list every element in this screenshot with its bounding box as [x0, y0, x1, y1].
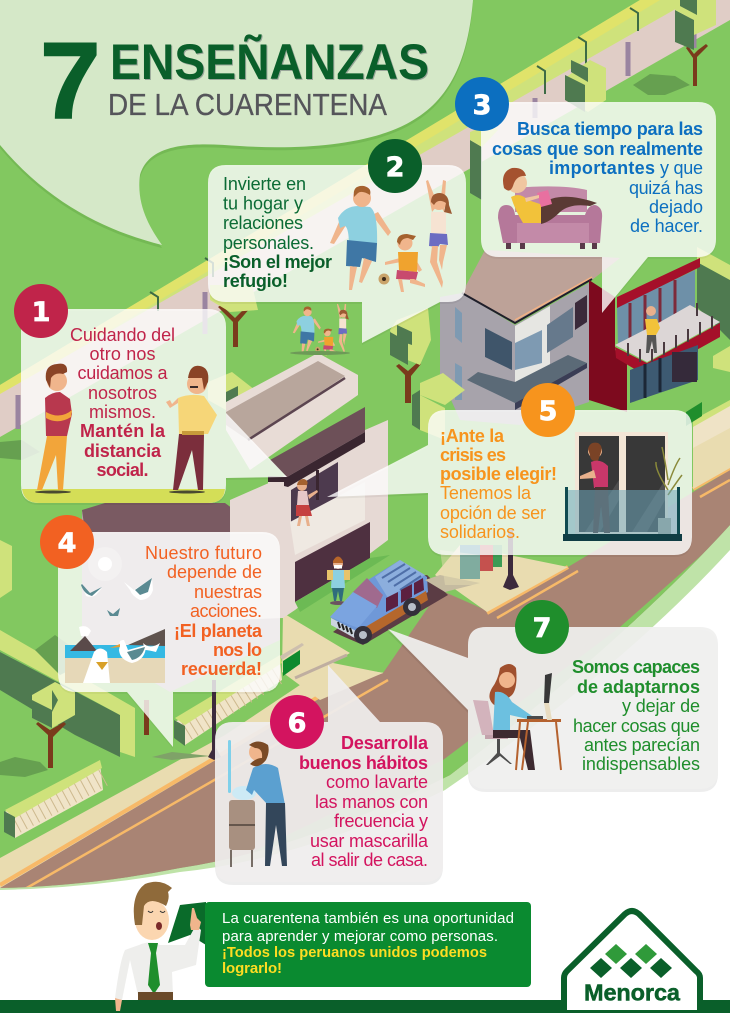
panel 4 text: acciones.	[190, 601, 262, 621]
recycle bins	[425, 545, 502, 592]
right hedges	[697, 247, 730, 372]
panel 4 text: nos lo	[213, 640, 262, 660]
panel 4 text	[145, 543, 263, 679]
numeral 7: 7	[40, 20, 101, 142]
hedge tree upper middle	[565, 60, 606, 112]
panel 4 text: nuestras	[194, 582, 262, 602]
sidewalk patch right	[435, 545, 568, 612]
panel 3 text	[492, 119, 703, 236]
road	[0, 470, 730, 900]
red block	[589, 280, 627, 412]
logo word: Menorca	[584, 980, 681, 1006]
centre tree	[390, 308, 431, 403]
number 1: 1	[32, 297, 50, 328]
panel 6 text: buenos hábitos	[299, 753, 428, 773]
panel 3: time for what matters	[455, 77, 716, 315]
woman with groceries	[327, 556, 350, 605]
hedge left edge	[0, 540, 12, 598]
panel 3 text: y que	[660, 158, 703, 178]
panel 3 text: Busca tiempo para las	[517, 119, 703, 139]
number 2	[368, 139, 422, 193]
title: ENSEÑANZAS	[110, 34, 429, 90]
panel 1 text: cuidamos a	[78, 363, 168, 383]
number 3: 3	[473, 90, 491, 121]
number 4	[40, 515, 94, 569]
right fence	[693, 400, 730, 448]
garage	[295, 522, 370, 602]
number 5	[521, 383, 575, 437]
lower-left hedge	[0, 630, 135, 757]
picket fence middle	[174, 655, 282, 746]
panel 7 text: de adaptarnos	[577, 677, 700, 697]
dark ground patch	[35, 635, 65, 675]
number 1	[14, 284, 68, 338]
driveway patch	[282, 613, 383, 700]
panel 5: choosing in a crisis	[327, 383, 692, 557]
number 7	[515, 600, 569, 654]
panel 2 text: Invierte en	[223, 174, 306, 194]
panel 6: good habits	[215, 665, 443, 885]
panel 1 text: social.	[96, 460, 148, 480]
number 6: 6	[288, 708, 306, 739]
man in yellow sweater	[166, 366, 217, 494]
panel 7 text: y dejar de	[622, 696, 700, 716]
panel 7 text: antes parecían	[584, 735, 700, 755]
panel 6 text: Desarrolla	[341, 733, 429, 753]
panel 7 text	[572, 657, 700, 774]
panel 2 text: tu hogar y	[223, 194, 303, 214]
man washing hands illustration	[228, 740, 287, 867]
number 4: 4	[58, 528, 76, 559]
panel 4 text: depende de	[167, 562, 262, 582]
subheading: DE LA CUARENTENA	[108, 87, 387, 122]
tree shadow bottom-left	[0, 757, 48, 777]
number 3	[455, 77, 509, 131]
panel 7 text: Somos capaces	[572, 657, 700, 677]
Menorca logo	[564, 911, 700, 1013]
hedge near bubble 3	[470, 124, 498, 200]
panel 7: able to adapt	[388, 600, 718, 792]
number 6	[270, 695, 324, 749]
panel 1 text: mismos.	[89, 402, 156, 422]
banner text: lograrlo!	[222, 960, 282, 977]
panel 5 text: crisis es	[440, 445, 506, 465]
sign left	[280, 643, 304, 676]
small tree upper left of centre	[210, 285, 258, 347]
banner text: La cuarentena también es una oportunidad	[222, 910, 514, 927]
diamonds	[590, 944, 672, 978]
panel 4: our future	[40, 515, 280, 749]
house B	[440, 250, 720, 425]
panel 6 text: frecuencia y	[334, 811, 428, 831]
panel 2 text	[223, 174, 332, 291]
perimeter wall	[0, 0, 730, 437]
panel 5 text: ¡Ante la	[440, 426, 505, 446]
house A	[82, 353, 390, 692]
panel 6 text	[299, 733, 429, 870]
column	[268, 482, 284, 486]
panel 4 text: Nuestro futuro	[145, 543, 262, 563]
fence behind bubble 5	[440, 550, 480, 585]
car	[330, 560, 448, 645]
hedge behind bubble 1	[208, 372, 255, 410]
woman on sofa illustration	[498, 168, 602, 249]
windows	[291, 462, 338, 525]
lamp post right	[503, 530, 519, 590]
panel 5 text: solidarios.	[440, 522, 520, 542]
centre hedge	[412, 373, 465, 440]
man at window illustration	[563, 432, 682, 541]
green flag behind man	[168, 902, 206, 945]
panel 2 text: relaciones	[223, 213, 303, 233]
panel 3 text: de hacer.	[630, 216, 703, 236]
lamp post left	[152, 680, 221, 760]
panel 1 text: otro nos	[90, 344, 156, 364]
tree shadow left	[0, 440, 21, 460]
panel 3 text: quizá has	[629, 178, 703, 198]
sign right	[686, 402, 702, 426]
panel 4 text: recuerda!	[181, 659, 262, 679]
roof slab	[226, 353, 358, 470]
ground strip	[22, 489, 225, 503]
panel 5 text: posible elegir!	[440, 464, 557, 484]
tree bottom-left	[32, 682, 75, 768]
panel 2: invest in your home	[208, 139, 466, 345]
banner text: ¡Todos los peruanos unidos podemos	[222, 944, 487, 961]
panel 3 text: importantes	[549, 158, 655, 178]
panel 1 text: nosotros	[88, 383, 157, 403]
banner text	[222, 910, 514, 977]
man on balcony	[645, 306, 660, 353]
panel 6 text: al salir de casa.	[311, 850, 428, 870]
panel 1 text: Mantén la	[80, 421, 166, 441]
panel 1 text: distancia	[84, 441, 162, 461]
panel 6 text: como lavarte	[326, 772, 428, 792]
heading enseñanzas: ENSEÑANZAS	[111, 35, 430, 91]
curb lines	[0, 468, 730, 889]
panel 1 text: Cuidando del	[70, 325, 175, 345]
number 2: 2	[386, 152, 404, 183]
lower wing	[82, 512, 280, 692]
banner text: para aprender y mejorar como personas.	[222, 928, 498, 945]
panel 3 text: cosas que son realmente	[492, 139, 703, 159]
grass strip beneath road	[443, 554, 702, 778]
panel 6 text: usar mascarilla	[310, 831, 429, 851]
panel 5 text: Tenemos la	[440, 483, 532, 503]
bottom green band	[0, 1000, 730, 1013]
panel 2 text: ¡Son el mejor	[223, 252, 332, 272]
panel 7 text: indispensables	[582, 754, 700, 774]
number 7: 7	[533, 613, 551, 644]
balcony woman	[296, 479, 318, 526]
family playing illustration	[330, 180, 452, 292]
tree top right	[675, 0, 716, 86]
tree shadow	[633, 74, 690, 95]
picket fence bottom-left	[4, 760, 103, 838]
seagulls on the beach illustration	[65, 547, 165, 683]
panel 1 text	[70, 325, 175, 480]
title speech bubble	[0, 0, 473, 248]
dark roof	[270, 407, 365, 477]
panel 5 text: opción de ser	[440, 503, 546, 523]
number 5: 5	[539, 396, 557, 427]
man with crossed arms	[35, 364, 72, 494]
presenter man	[115, 882, 201, 1011]
closing message banner	[205, 902, 531, 987]
panel 1: caring for others	[14, 284, 287, 505]
panel 7 text: hacer cosas que	[573, 716, 700, 736]
tree behind bubble 4 tail	[144, 700, 149, 735]
panel 2 text: personales.	[223, 233, 314, 253]
panel 4 text: ¡El planeta	[174, 621, 263, 641]
right sidewalk	[693, 425, 730, 489]
panel 6 text: las manos con	[315, 792, 428, 812]
sidewalk left	[0, 665, 385, 892]
panel 3 text: dejado	[649, 197, 703, 217]
title	[40, 20, 430, 142]
panel 5 text	[440, 426, 557, 542]
panel 2 text: refugio!	[223, 271, 288, 291]
woman at computer illustration	[473, 664, 561, 770]
